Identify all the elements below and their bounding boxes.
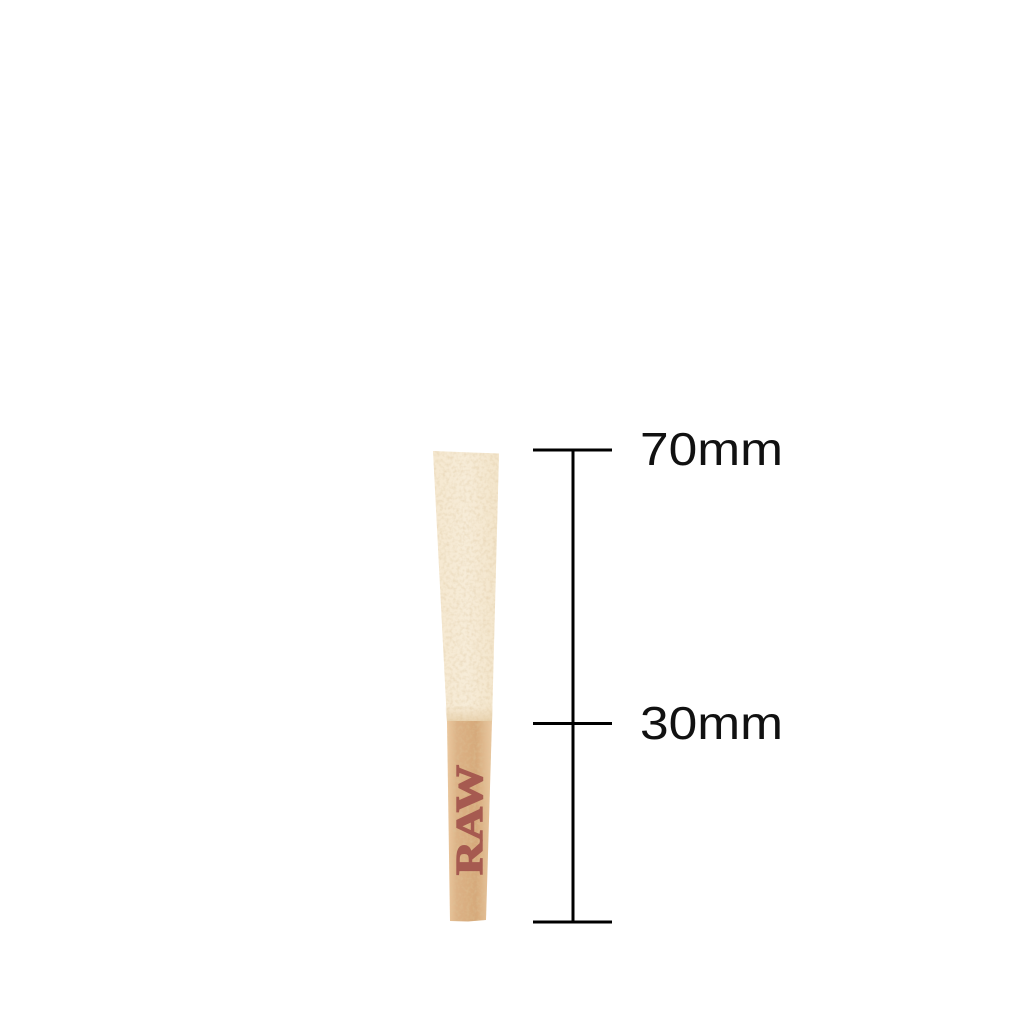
measurement scale <box>533 450 612 922</box>
cone brown base <box>447 721 492 922</box>
middle tick: 30mm <box>533 722 612 725</box>
RAW logo: RAW <box>449 765 491 875</box>
label: 30mm: 30mm <box>640 697 783 749</box>
cone product <box>433 451 499 922</box>
cone paper tip <box>433 451 499 722</box>
label: 70mm: 70mm <box>640 423 783 475</box>
vertical scale line <box>572 450 574 922</box>
bottom tick <box>533 920 612 924</box>
top tick: 70mm <box>533 448 612 452</box>
